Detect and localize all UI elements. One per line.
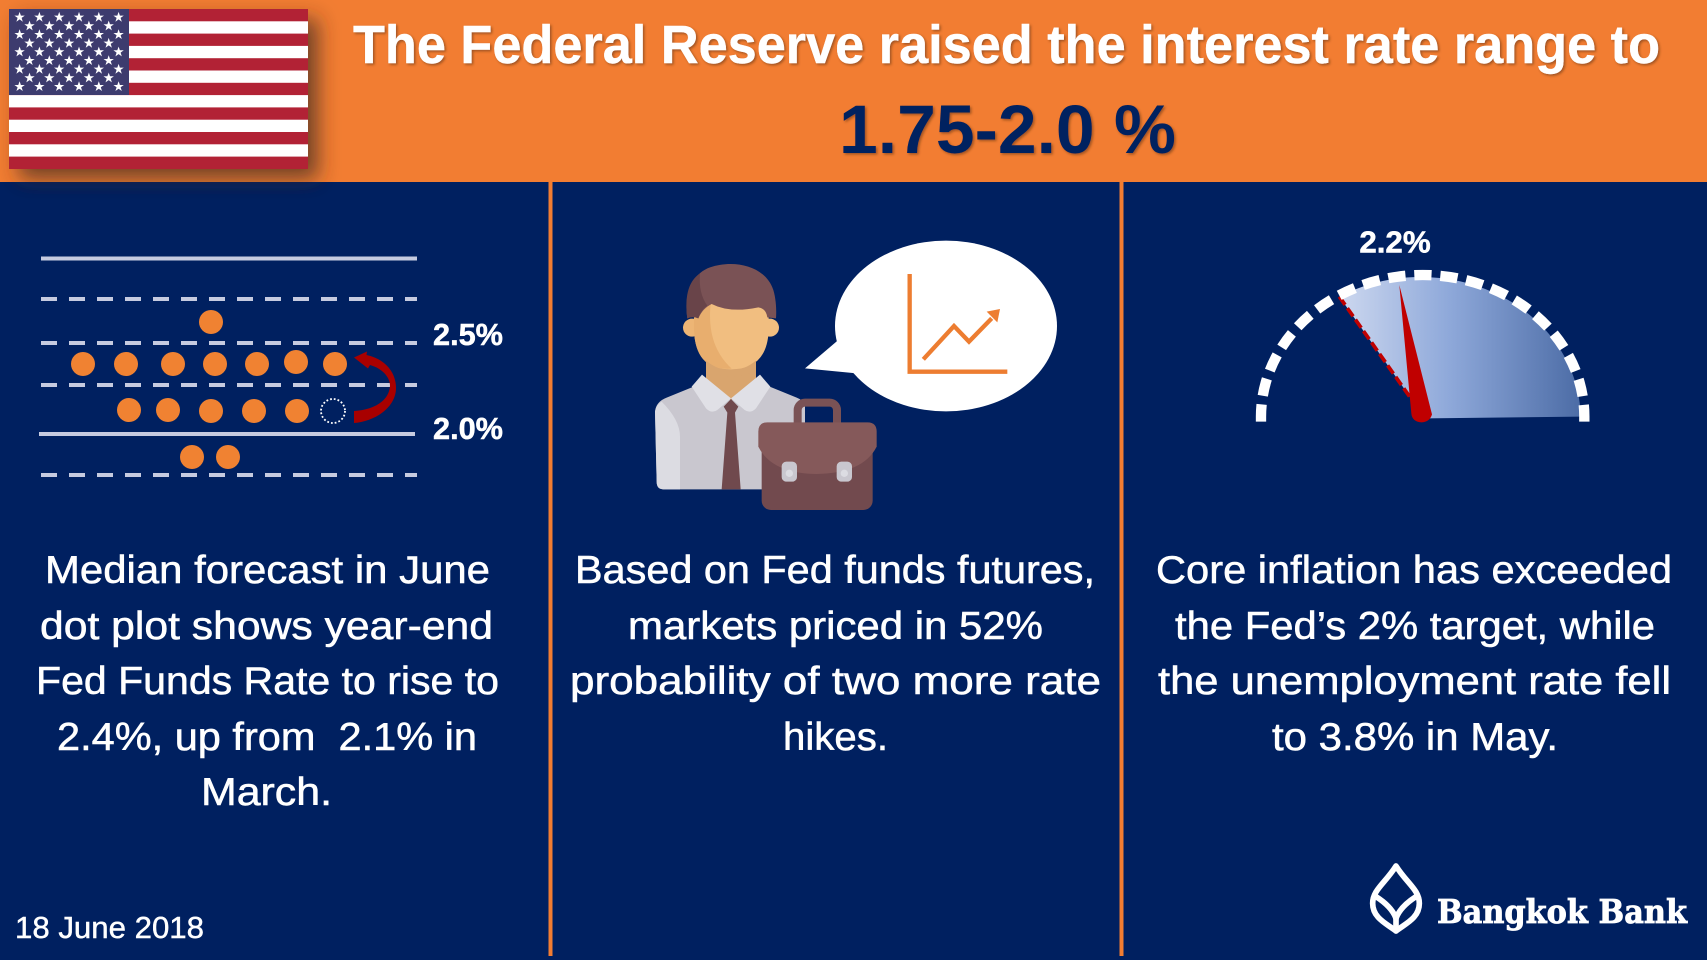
text: Fed funds futures: Based on Fed funds futures, [575,549,1095,592]
text: dot plot forecast: Fed Funds Rate to rise to [36,660,499,703]
icon: US flag [9,9,308,169]
panel: inflation [1156,224,1688,931]
chart: inflation gauge [1261,224,1584,422]
icon: lotus leaf [1373,866,1419,931]
label: 2.0%: 2.0% [433,411,503,446]
text: core inflation [1156,549,1672,759]
arrow: rate shift up [354,352,396,423]
text: Fed funds futures: markets priced in 52% [628,605,1043,648]
text: Fed funds futures [570,549,1101,759]
text: core inflation: to 3.8% in May. [1272,716,1558,759]
text: core inflation: the Fed’s 2% target, while [1175,605,1655,648]
text: dot plot forecast: March. [201,771,332,814]
headline rate: 1.75-2.0 % [839,91,1176,168]
logo: Bangkok Bank [1373,866,1688,931]
header banner [0,0,1707,182]
text: dot plot forecast: Median forecast in June [45,549,490,592]
label: 2.5%: 2.5% [433,317,503,352]
panel: market expectations [570,241,1101,759]
text: dot plot forecast: 2.4%, up from 2.1% in [57,716,477,759]
text: dot plot forecast [36,549,499,814]
label: 2.2%: 2.2% [1359,224,1431,259]
date: 18 June 2018 [15,910,204,945]
speech bubble [805,241,1057,411]
text: Fed funds futures: probability of two more rate [570,660,1101,703]
wordmark: Bangkok Bank [1437,892,1688,931]
briefcase [758,403,877,510]
column dividers [548,182,1124,956]
text: core inflation: the unemployment rate fell [1158,660,1671,703]
person [655,264,805,489]
text: core inflation: Core inflation has exceeded [1156,549,1672,592]
text: dot plot forecast: dot plot shows year-end [40,605,493,648]
panel: dot plot [15,258,503,945]
icon: businessman with speech bubble and briefcase [655,241,1057,510]
chart: dot plot [39,258,503,475]
text: Fed funds futures: hikes. [783,716,888,759]
title: The Federal Reserve raised the interest rate range to [353,15,1660,75]
